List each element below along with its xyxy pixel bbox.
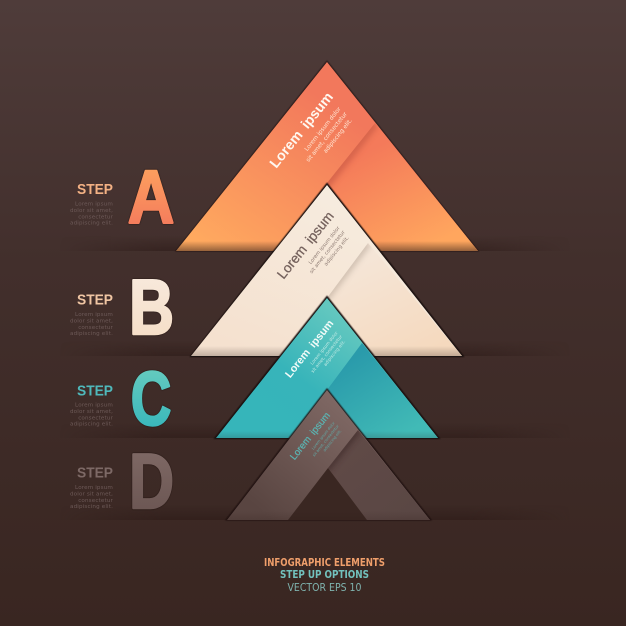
body text A: adipiscing elit. bbox=[323, 118, 354, 155]
step C text: consectetur bbox=[78, 416, 114, 422]
step D label: STEP bbox=[77, 464, 113, 482]
body text D: sit amet, consectetur bbox=[312, 424, 340, 457]
body text B bbox=[304, 225, 352, 279]
step C text: Lorem ipsum bbox=[75, 402, 113, 408]
step D text bbox=[70, 485, 114, 510]
body text B: Lorem ipsum dolor bbox=[308, 225, 342, 266]
step A bbox=[70, 155, 174, 239]
body text D: Lorem ipsum dolor bbox=[311, 421, 336, 451]
step C bbox=[70, 357, 171, 442]
body text A: Lorem ipsum dolor bbox=[304, 106, 343, 153]
body text D bbox=[308, 421, 344, 461]
body text B: sit amet, consectetur bbox=[309, 229, 347, 275]
shelf shadows bbox=[122, 246, 504, 520]
step C text: dolor sit amet, bbox=[70, 409, 113, 415]
step A text: Lorem ipsum bbox=[75, 202, 113, 208]
triangle D: grey-brown chevron bbox=[225, 388, 432, 520]
step A text bbox=[70, 202, 114, 226]
step B text: dolor sit amet, bbox=[70, 318, 113, 324]
footer caption bbox=[264, 556, 385, 594]
letter C: C bbox=[131, 357, 171, 442]
label: Lorem ipsum A: Lorem ipsum bbox=[267, 90, 337, 171]
body text B: adipiscing elit. bbox=[323, 235, 351, 267]
letter D: D bbox=[129, 437, 174, 525]
body text C bbox=[306, 330, 348, 378]
body text C: sit amet, consectetur bbox=[310, 334, 344, 374]
triangle B: cream bbox=[185, 182, 470, 357]
step B text: adipiscing elit. bbox=[70, 331, 113, 337]
step B label: STEP bbox=[77, 292, 113, 308]
triangle C: teal bbox=[210, 296, 445, 439]
step B text: consectetur bbox=[78, 325, 114, 331]
step A label: STEP bbox=[77, 181, 113, 198]
step B bbox=[70, 263, 174, 351]
step D text: Lorem ipsum bbox=[75, 485, 113, 491]
step D bbox=[70, 437, 174, 525]
step C label: STEP bbox=[77, 382, 113, 400]
step B text bbox=[70, 312, 114, 337]
triangle A: orange bbox=[170, 60, 485, 252]
footer caption: INFOGRAPHIC ELEMENTS bbox=[264, 556, 385, 569]
step A text: adipiscing elit. bbox=[70, 220, 113, 226]
body text C: adipiscing elit. bbox=[323, 339, 347, 368]
body text A bbox=[299, 106, 355, 169]
step D text: consectetur bbox=[78, 498, 114, 504]
label: Lorem ipsum B: Lorem ipsum bbox=[274, 209, 337, 282]
step D text: adipiscing elit. bbox=[70, 504, 113, 510]
letter B: B bbox=[129, 263, 174, 351]
body text A: sit amet, consectetur bbox=[306, 111, 349, 164]
body text C: Lorem ipsum dolor bbox=[309, 330, 340, 366]
step C text bbox=[70, 402, 114, 428]
letter A: A bbox=[128, 155, 174, 239]
label: Lorem ipsum C: Lorem ipsum bbox=[283, 318, 336, 380]
step A text: dolor sit amet, bbox=[70, 208, 113, 214]
label: Lorem ipsum D: Lorem ipsum bbox=[288, 410, 333, 462]
step B text: Lorem ipsum bbox=[75, 312, 113, 318]
body text D: adipiscing elit. bbox=[323, 429, 342, 452]
footer caption: VECTOR EPS 10 bbox=[288, 581, 362, 594]
footer caption: STEP UP OPTIONS bbox=[280, 568, 369, 581]
step D text: dolor sit amet, bbox=[70, 492, 113, 498]
step A text: consectetur bbox=[78, 214, 114, 220]
step C text: adipiscing elit. bbox=[70, 422, 113, 428]
